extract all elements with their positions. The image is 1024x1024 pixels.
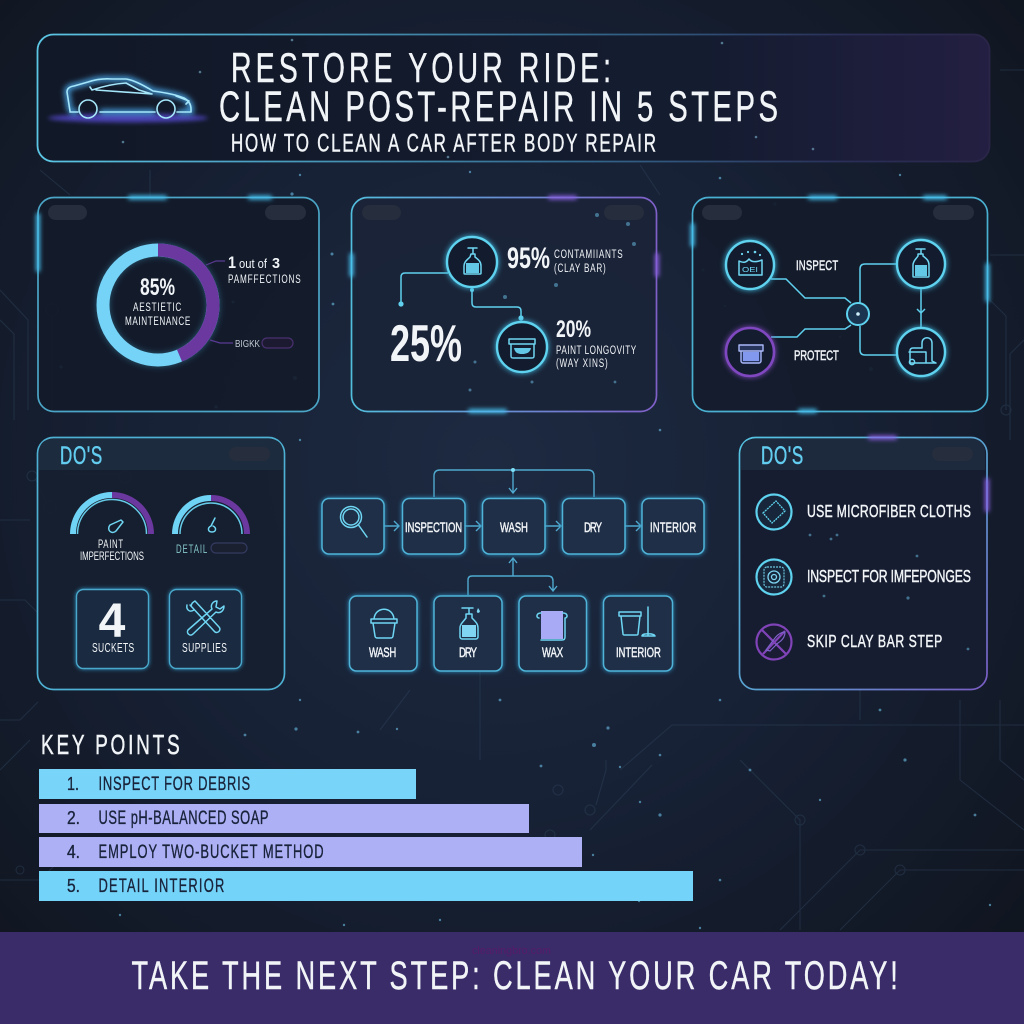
donut centre label [125, 274, 190, 329]
header panel [38, 34, 990, 162]
title [219, 43, 778, 130]
flow connector bottom [468, 558, 557, 595]
hub connector lines [771, 264, 925, 355]
flow arrows [384, 521, 641, 531]
bar 2: 2. [67, 808, 80, 828]
item: skip clay bar step [756, 624, 942, 660]
tool: interior bucket and mop: INTERIOR [616, 644, 661, 661]
panel: do's left [38, 438, 284, 690]
bar 1 [39, 769, 416, 799]
stat box: supplies: SUPPLIES [182, 641, 227, 656]
step: inspection [402, 498, 465, 554]
stat: 95% contaminants: 95% [507, 242, 550, 275]
donut centre label: MAINTENANCE [125, 316, 190, 329]
step: inspection: INSPECTION [405, 519, 462, 536]
item: microfiber cloths: USE MICROFIBER CLOTHS [807, 502, 971, 522]
callout: 1 out of 3: out of [239, 256, 267, 271]
title: CLEAN POST-REPAIR IN 5 STEPS [219, 82, 778, 130]
icon: wax tub circle [497, 322, 547, 372]
gauge: paint imperfections [73, 495, 151, 564]
connector lines [398, 273, 524, 321]
stat: 20% paint longevity: PAINT LONGOVITY [556, 345, 636, 358]
icon: soap tub circle [726, 241, 774, 289]
bar 1: INSPECT FOR DEBRIS [98, 774, 250, 795]
icon: soap tub circle: OEI [742, 267, 758, 274]
bar 3: EMPLOY TWO-BUCKET METHOD [98, 842, 324, 863]
gauge: detail [175, 498, 247, 557]
subtitle: HOW TO CLEAN A CAR AFTER BODY REPAIR [231, 129, 656, 157]
donut centre label: 85% [140, 274, 175, 301]
item: inspect for imfeponges [756, 560, 971, 594]
tool: wash bucket: WASH [369, 644, 396, 661]
bar 4: 5. [67, 876, 80, 896]
list: key points bars [39, 769, 693, 901]
icon: spray bottle circle [447, 237, 497, 287]
callout: pill label: BIGKK [235, 338, 260, 350]
flowchart: process steps [322, 468, 704, 671]
label: inspect: INSPECT [796, 257, 839, 274]
panel: percentage stats [352, 198, 657, 412]
callout: 1 out of 3 [206, 253, 301, 287]
step: magnifier [322, 498, 384, 554]
callout: 1 out of 3: 1 [228, 253, 236, 272]
step: interior: INTERIOR [650, 519, 697, 536]
tool: wash bucket [350, 596, 417, 671]
gauge: detail: DETAIL [176, 544, 208, 557]
stat box: 4 buckets: SUCKETS [92, 641, 134, 656]
tool: dry spray [434, 596, 502, 671]
bar 1: 1. [67, 774, 79, 794]
item: inspect for imfeponges: INSPECT FOR IMFEPONGES [807, 567, 971, 587]
stat: 25%: 25% [390, 315, 462, 373]
gauge: paint imperfections: PAINT [98, 539, 123, 552]
stat box: 4 buckets: 4 [99, 595, 126, 648]
icon: vacuum circle [897, 328, 945, 376]
tool: wax towel [519, 596, 586, 671]
stat: 95% contaminants: CONTAMIIANTS [554, 249, 623, 262]
stat box: supplies [170, 590, 242, 668]
icon: bottle circle [897, 240, 945, 288]
panel: process hub [692, 198, 988, 412]
icon: glowing car [48, 79, 208, 122]
step: interior [642, 498, 704, 554]
flow connector top [434, 468, 594, 497]
bar 3: 4. [67, 842, 80, 862]
step: dry [562, 498, 625, 554]
item: skip clay bar step: SKIP CLAY BAR STEP [807, 632, 942, 652]
stat: 95% contaminants: (CLAY BAR) [554, 263, 606, 276]
bar 4 [39, 871, 693, 901]
chart: donut 85% [103, 250, 213, 360]
heading: do's: DO'S [761, 442, 803, 470]
heading: do's: DO'S [60, 442, 102, 470]
title: RESTORE YOUR RIDE: [231, 43, 611, 91]
item: microfiber cloths [756, 494, 971, 530]
gauge: paint imperfections: IMPERFECTIONS [80, 551, 144, 564]
bar 2 [39, 804, 529, 833]
panel: do's right [740, 438, 987, 690]
stat: 20% paint longevity: (WAY XINS) [556, 358, 608, 371]
tool: wax towel: WAX [542, 644, 563, 661]
panel: donut stats [38, 198, 319, 412]
label: protect: PROTECT [794, 347, 839, 364]
bar 4: DETAIL INTERIOR [98, 876, 224, 897]
bar 2: USE pH-BALANCED SOAP [98, 808, 269, 829]
heading: key points: KEY POINTS [41, 729, 180, 761]
donut centre label: AESTIETIC [133, 302, 182, 315]
stat: 95% contaminants [507, 242, 623, 276]
callout: pill label [210, 338, 293, 350]
bar 3 [39, 837, 582, 867]
tool: interior bucket and mop [604, 596, 672, 671]
step: wash [482, 498, 545, 554]
footer banner [0, 932, 1024, 1024]
call to action: TAKE THE NEXT STEP: CLEAN YOUR CAR TODAY! [132, 954, 898, 998]
callout: 1 out of 3: 3 [272, 255, 280, 272]
hub node [847, 303, 869, 325]
icon: wax tub purple circle [726, 328, 774, 376]
step: wash: WASH [500, 519, 528, 536]
callout: 1 out of 3: PAMFFECTIONS [228, 274, 301, 287]
stat box: 4 buckets [76, 590, 148, 668]
tool: dry spray: DRY [459, 644, 477, 661]
stat: 20% paint longevity [556, 316, 636, 371]
stat: 20% paint longevity: 20% [556, 316, 591, 343]
watermark: cleaningbro.com [472, 945, 551, 957]
step: dry: DRY [584, 519, 602, 536]
